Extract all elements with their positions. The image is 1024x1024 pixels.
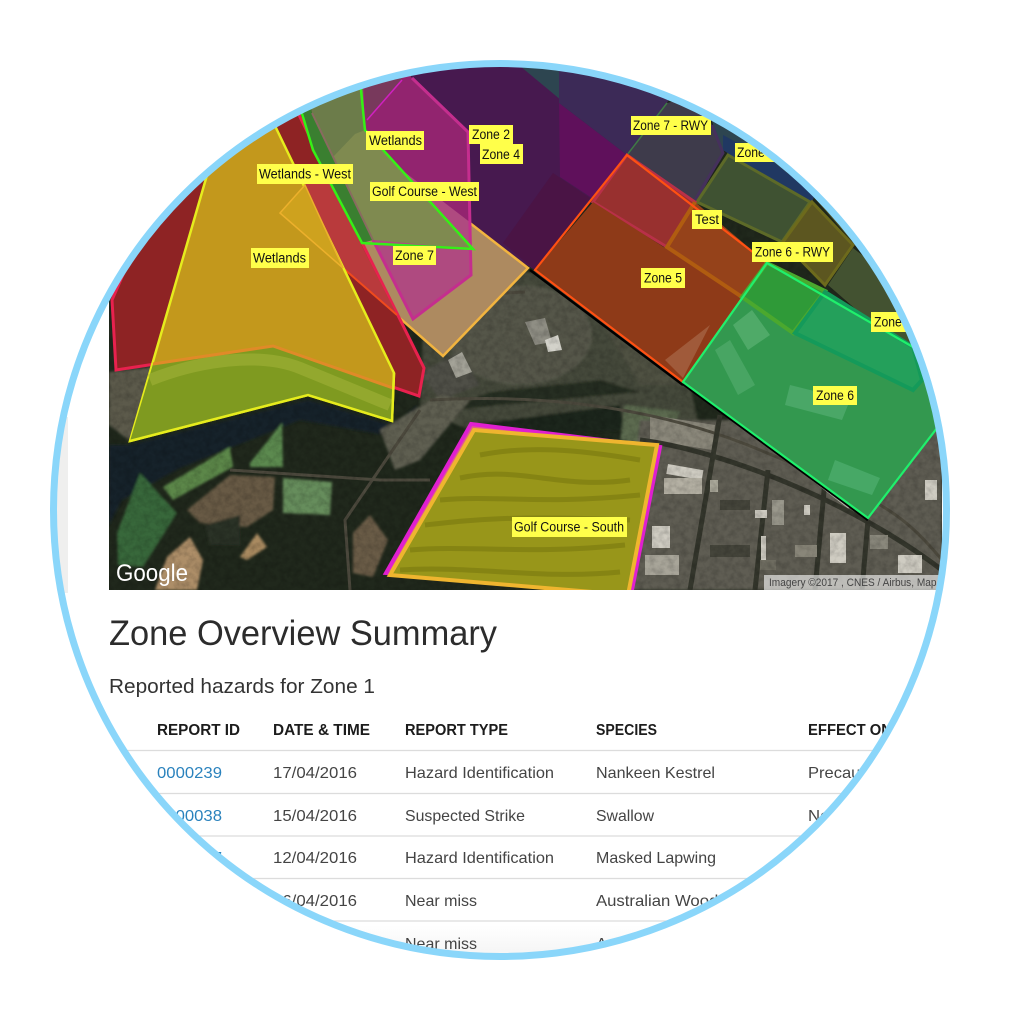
label: Zone clipped right: Zone 1: [874, 314, 912, 330]
label: Zone 2: Zone 2: [472, 127, 510, 142]
table row 1: [158, 766, 859, 778]
table header: SPECIES: [596, 722, 657, 739]
zone: Wetlands yellow area: [128, 127, 396, 443]
table row 4: Near miss: [405, 893, 477, 910]
imagery attribution: Imagery ©2017 , CNES / Airbus, Map data: [769, 577, 960, 589]
table row 3: Masked Lapwing: [596, 850, 716, 867]
table row 5: Near miss: [405, 936, 477, 953]
zone: Zone 5: [530, 155, 767, 385]
industrial buildings: [645, 464, 937, 575]
table row 3: 0000037: [157, 850, 222, 867]
label: Zone 5: [641, 268, 685, 288]
label: Zone 6 RWY: Zone 6 - RWY: [755, 244, 830, 260]
table row 3: 12/04/2016: [273, 850, 357, 867]
zone: upper right dark teal and navy: [522, 68, 814, 201]
heading: Zone Overview Summary: Zone Overview Summary: [109, 614, 497, 653]
zone: 6 runway north: [696, 153, 910, 343]
table header: [158, 724, 886, 735]
zone: Golf Course West tan area: [364, 222, 530, 358]
table row 1: Nankeen Kestrel: [596, 765, 715, 782]
zone: runway 7: [559, 71, 725, 201]
blue circle border: [54, 64, 946, 956]
table row 4: Australian Wood Duck: [596, 893, 762, 910]
table row 2: Swallow: [596, 808, 654, 825]
table row 2: Suspected Strike: [405, 808, 525, 825]
table row 1: Precautionary: [808, 765, 910, 782]
label: Zone 7: Zone 7: [395, 248, 434, 263]
table header: REPORT ID: [157, 722, 240, 739]
label: Test: [692, 210, 722, 229]
label: Zone 6 RWY: [752, 242, 833, 262]
table row 2: 0000038: [157, 808, 222, 825]
table row 2: None: [808, 808, 848, 825]
label: Zone 4: Zone 4: [482, 147, 520, 162]
table row 4: [273, 893, 762, 910]
zone: Golf Course South: [386, 424, 660, 595]
zone: green wetlands area: [300, 88, 476, 250]
table row 4: 06/04/2016: [273, 893, 357, 910]
Google logo: Google: [116, 560, 188, 587]
label: Golf Course South: Golf Course - South: [514, 520, 624, 534]
zone: purple zones 2 and 4: [412, 67, 626, 270]
table header: REPORT TYPE: [405, 722, 508, 739]
texture noise: [109, 274, 942, 590]
table row 1: 17/04/2016: [273, 765, 357, 782]
table row 1: 0000239: [157, 765, 222, 782]
subheading: Reported hazards: Reported hazards for Zone 1: [109, 676, 375, 698]
satellite map panel: [109, 50, 970, 595]
table: reported hazards: [128, 724, 886, 953]
table row 2: [176, 810, 824, 824]
label: Test: Test: [695, 212, 719, 227]
label: Wetlands West: Wetlands - West: [259, 166, 351, 182]
zone: Zone 6: [682, 262, 936, 521]
table row 1: Hazard Identification: [405, 765, 554, 782]
table row 5: Australian Wood Duck: [596, 936, 762, 953]
label: Zone clipped top right: Zone 3: [737, 145, 775, 160]
circular screenshot lens: [50, 50, 970, 960]
zone: red upper block: [593, 155, 695, 247]
label: Zone clipped right: [871, 312, 906, 332]
imagery attribution: [764, 575, 938, 590]
table row 3: Hazard Identification: [405, 850, 554, 867]
label: Golf Course West: Golf Course - West: [372, 184, 477, 199]
label: Zone 5: Zone 5: [644, 270, 682, 286]
table header: DATE & TIME: [273, 722, 370, 739]
table row 2: 15/04/2016: [273, 808, 357, 825]
zone: Wetlands West red area: [112, 90, 424, 396]
table row 3: [157, 850, 716, 867]
label: Wetlands lower: Wetlands: [253, 250, 306, 266]
label: Zone 6: Zone 6: [816, 388, 854, 403]
table header: EFFECT ON: [808, 722, 892, 739]
table row 5: [405, 936, 762, 953]
zone: magenta area: [363, 76, 472, 322]
label: Wetlands upper: Wetlands: [369, 133, 422, 148]
label: Zone 7 RWY: Zone 7 - RWY: [633, 118, 708, 133]
